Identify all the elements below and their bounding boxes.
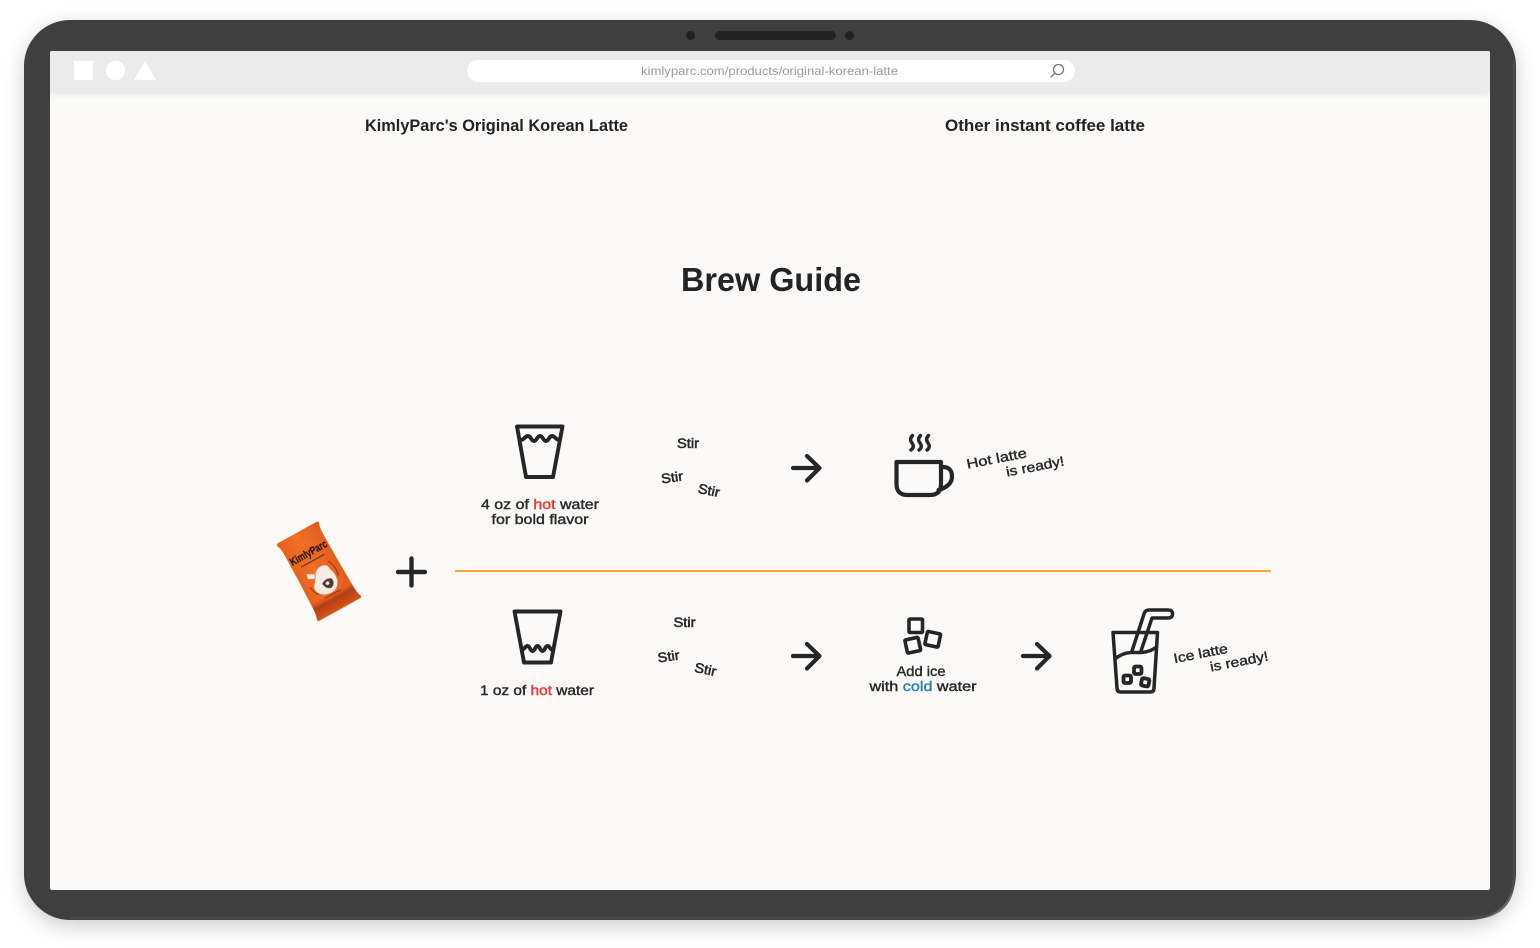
caption: add ice with cold water bbox=[868, 664, 977, 694]
product packet bbox=[275, 520, 362, 622]
stir text: ice row: Stir bbox=[693, 660, 718, 679]
label: ice latte is ready: Ice latte bbox=[1172, 641, 1229, 666]
address bar: kimlyparc.com/products/original-korean-latte bbox=[641, 64, 898, 78]
stir text: hot row: Stir bbox=[677, 436, 700, 451]
arrow: hot row bbox=[793, 456, 820, 480]
device camera notch bbox=[686, 31, 854, 40]
stir text: ice row bbox=[657, 615, 718, 679]
icon: glass with 4 oz water bbox=[517, 426, 562, 477]
title: Brew Guide bbox=[681, 261, 861, 298]
label: hot latte is ready: is ready! bbox=[1005, 453, 1065, 479]
column heading: KimlyParc: KimlyParc's Original Korean Latte bbox=[365, 117, 628, 135]
label: hot latte is ready bbox=[965, 445, 1065, 479]
icon: search bbox=[1051, 64, 1064, 77]
icon: plus bbox=[398, 558, 425, 586]
icon: iced latte glass bbox=[1113, 610, 1173, 692]
address bar bbox=[467, 60, 1075, 82]
stir text: hot row: Stir bbox=[697, 481, 722, 500]
label: ice latte is ready bbox=[1172, 641, 1269, 674]
arrow: ice row second bbox=[1023, 644, 1050, 668]
label: hot latte is ready: Hot latte bbox=[965, 445, 1028, 472]
stir text: ice row: Stir bbox=[657, 647, 681, 665]
browser toolbar bbox=[50, 51, 1490, 94]
browser window shapes bbox=[74, 61, 156, 80]
icon: ice cubes bbox=[905, 619, 941, 653]
caption: 4 oz of hot water: for bold flavor bbox=[492, 512, 589, 527]
stir text: hot row: Stir bbox=[660, 468, 685, 486]
caption: 4 oz of hot water: 4 oz of hot water bbox=[481, 497, 600, 512]
column heading: other instant coffee: Other instant coffee latte bbox=[945, 117, 1145, 135]
caption: 1 oz of hot water: 1 oz of hot water bbox=[480, 683, 595, 698]
arrow: after stirring ice row bbox=[793, 644, 820, 668]
caption: 4 oz of hot water bbox=[481, 497, 600, 527]
caption: add ice with cold water: Add ice bbox=[896, 664, 946, 679]
product packet: KimlyParc bbox=[288, 538, 330, 569]
icon: glass with 1 oz water bbox=[514, 612, 560, 662]
label: ice latte is ready: is ready! bbox=[1209, 648, 1269, 674]
stir text: ice row: Stir bbox=[674, 615, 696, 630]
caption: add ice with cold water: with cold water bbox=[868, 679, 977, 694]
divider line bbox=[455, 570, 1271, 572]
stir text: hot row bbox=[660, 436, 722, 500]
icon: hot coffee cup bbox=[896, 436, 952, 495]
